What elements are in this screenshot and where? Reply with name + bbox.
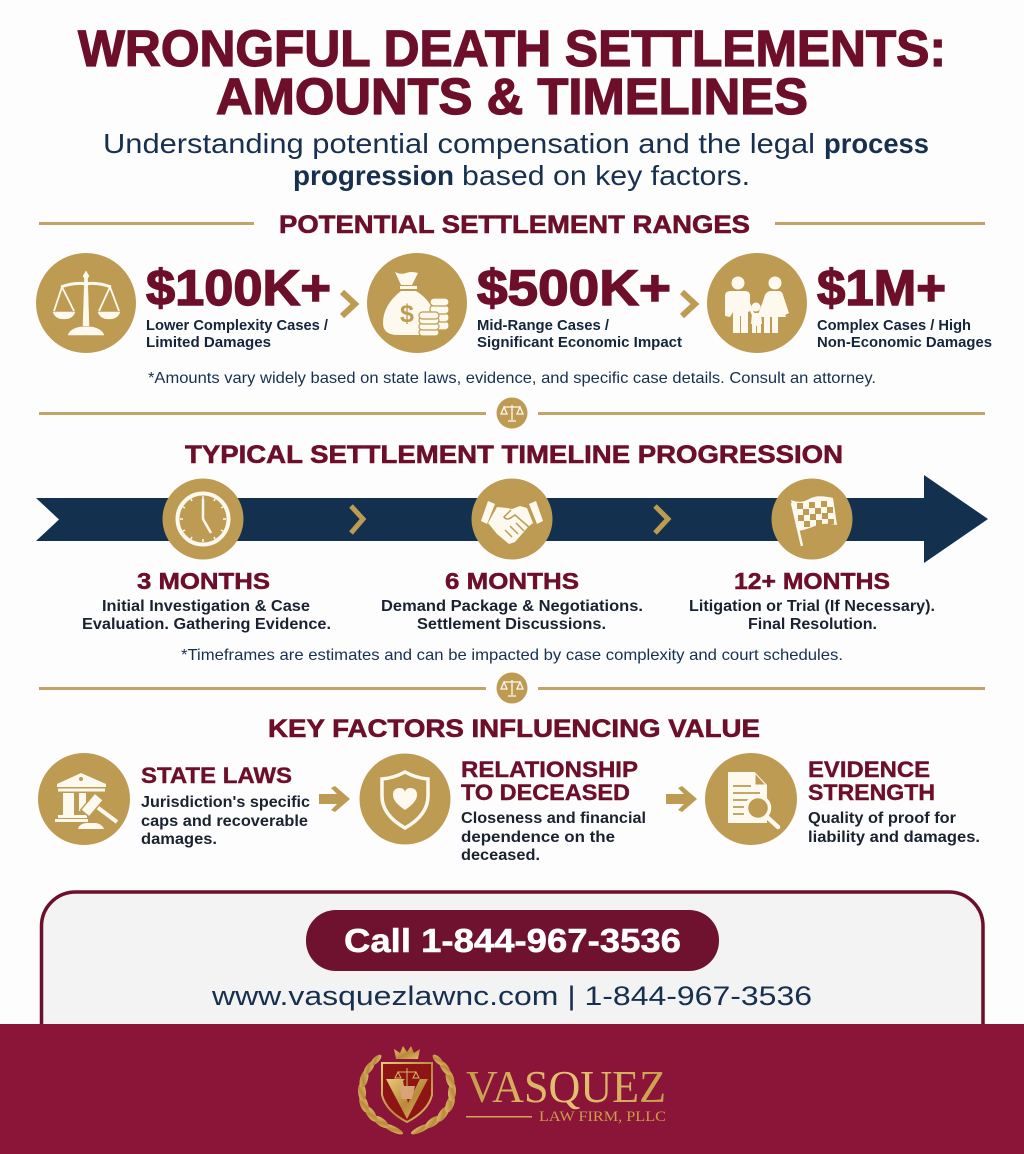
- $100K+ amount: $100K+: [146, 260, 331, 316]
- website and phone: www.vasquezlawnc.com | 1-844-967-3536: [211, 981, 812, 1011]
- $1M+ description: Non-Economic Damages: [817, 334, 992, 351]
- arrow: [319, 786, 350, 812]
- footer band: [0, 1024, 1024, 1154]
- factor: evidence strength: Quality of proof for: [808, 810, 956, 827]
- title: AMOUNTS & TIMELINES: [216, 68, 808, 125]
- factor: state laws: Jurisdiction's specific: [141, 794, 310, 811]
- $100K+ description: Limited Damages: [146, 334, 271, 351]
- shield: [382, 1063, 432, 1122]
- icon: checkered flag: [772, 478, 852, 560]
- icon: clock: [162, 478, 244, 560]
- factor: relationship to deceased: TO DECEASED: [461, 780, 630, 805]
- logo: wordmark: LAW FIRM, PLLC: [539, 1109, 666, 1125]
- $500K+ description: Mid-Range Cases /: [477, 317, 610, 334]
- $1M+ description: Complex Cases / High: [817, 317, 971, 334]
- factor: relationship to deceased: dependence on the: [461, 829, 615, 846]
- icon: shield with heart: [360, 754, 450, 844]
- $1M+ amount: $1M+: [817, 260, 946, 316]
- heading: key factors: KEY FACTORS INFLUENCING VALUE: [268, 715, 760, 743]
- small scales: [395, 1068, 419, 1088]
- $500K+ amount: $500K+: [477, 260, 671, 316]
- factor: evidence strength: EVIDENCE: [808, 757, 930, 782]
- icon: family: [707, 253, 807, 353]
- divider with scales icon: [39, 398, 985, 428]
- heading: timeline: TYPICAL SETTLEMENT TIMELINE PROGRESSION: [185, 441, 843, 469]
- timeline step: 3 months: [82, 568, 331, 633]
- logo: crest: [357, 1046, 457, 1136]
- chevron: [655, 506, 668, 533]
- icon: money bag: $: [400, 300, 414, 328]
- subtitle: progression: [293, 160, 454, 191]
- $100K+ description: [146, 317, 329, 351]
- crown: [394, 1046, 420, 1059]
- subtitle: based on key factors.: [462, 160, 750, 191]
- title: [78, 20, 946, 125]
- icon: courthouse and gavel: [38, 753, 130, 845]
- settlement note: *Amounts vary widely based on state laws, evidence, and specific case details. Consult an attorney.: [148, 370, 876, 387]
- panel: settlement ranges: [36, 253, 992, 353]
- timeline step: 12+ months: Litigation or Trial (If Necessary).: [689, 598, 935, 615]
- subtitle: Understanding potential compensation and the legal: [103, 128, 815, 159]
- panel: contact box: [42, 892, 983, 1030]
- logo: wordmark: VASQUEZ: [466, 1061, 666, 1112]
- heading: potential settlement ranges: POTENTIAL SETTLEMENT RANGES: [279, 211, 750, 239]
- factor: evidence strength: STRENGTH: [808, 780, 935, 805]
- timeline step: 12+ months: Final Resolution.: [748, 616, 877, 633]
- pillar emblem: [399, 1086, 415, 1099]
- $1M+ description: [817, 317, 992, 351]
- timeline step: 6 months: Settlement Discussions.: [417, 616, 606, 633]
- timeline step: 6 months: [381, 568, 643, 633]
- $500K+ description: Significant Economic Impact: [477, 334, 682, 351]
- icon: document and magnifier: [705, 753, 797, 845]
- chevron arrow: [682, 292, 695, 316]
- title: WRONGFUL DEATH SETTLEMENTS:: [78, 20, 946, 77]
- $500K+ description: [477, 317, 682, 351]
- timeline note: *Timeframes are estimates and can be impacted by case complexity and court schedules.: [181, 647, 843, 664]
- factor: state laws: caps and recoverable: [141, 813, 308, 830]
- subtitle: process: [824, 128, 929, 159]
- chevron arrow: [342, 292, 355, 316]
- factor: evidence strength: [808, 757, 980, 846]
- timeline step: 6 months: 6 MONTHS: [445, 568, 579, 594]
- timeline arrow: [36, 475, 988, 563]
- call button: Call 1-844-967-3536: [344, 922, 681, 959]
- timeline step: 12+ months: [689, 568, 935, 633]
- V monogram: [386, 1079, 428, 1119]
- factor: relationship to deceased: Closeness and financial: [461, 810, 646, 827]
- subtitle: [103, 128, 929, 191]
- icon: money bag: [367, 253, 467, 353]
- factor: state laws: [141, 763, 310, 848]
- factor: evidence strength: liability and damages.: [808, 829, 980, 846]
- factor: relationship to deceased: deceased.: [461, 847, 540, 864]
- timeline step: 3 months: Evaluation. Gathering Evidence.: [82, 616, 331, 633]
- factor: state laws: STATE LAWS: [141, 763, 292, 788]
- heading: potential settlement ranges: [39, 211, 985, 239]
- timeline step: 3 months: 3 MONTHS: [137, 568, 270, 594]
- timeline step: 3 months: Initial Investigation & Case: [102, 598, 310, 615]
- icon: scales of justice: [36, 253, 136, 353]
- timeline step: 12+ months: 12+ MONTHS: [734, 568, 890, 594]
- chevron: [351, 506, 363, 533]
- call button: [306, 910, 719, 971]
- factor: relationship to deceased: [461, 757, 646, 864]
- icon: handshake: [472, 478, 552, 560]
- $100K+ description: Lower Complexity Cases /: [146, 317, 329, 334]
- timeline step: 6 months: Demand Package & Negotiations.: [381, 598, 643, 615]
- factor: state laws: damages.: [141, 831, 217, 848]
- factor: relationship to deceased: RELATIONSHIP: [461, 757, 638, 782]
- arrow: [666, 786, 697, 812]
- divider with scales icon: [39, 672, 985, 704]
- laurels: [357, 1053, 457, 1136]
